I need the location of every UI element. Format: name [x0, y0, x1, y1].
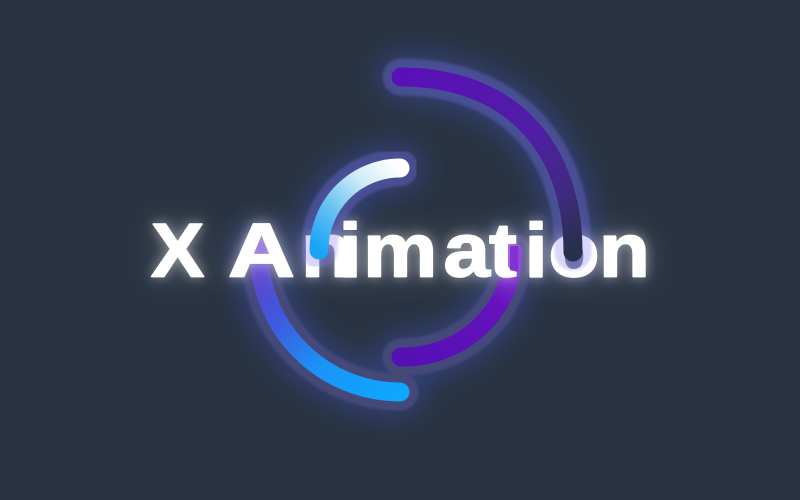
background glow behind arcs: [259, 77, 573, 392]
title: X: [151, 207, 204, 293]
arc: white to blue inner: [319, 168, 400, 250]
title: A: [228, 207, 295, 293]
title: nimation: [301, 208, 650, 293]
title: [151, 207, 650, 293]
arc: purple upper right: [401, 77, 573, 252]
arc: blue lower left: [259, 248, 400, 392]
arc: purple lower right: [401, 252, 513, 357]
purple stripe across the letter t: [510, 246, 518, 272]
